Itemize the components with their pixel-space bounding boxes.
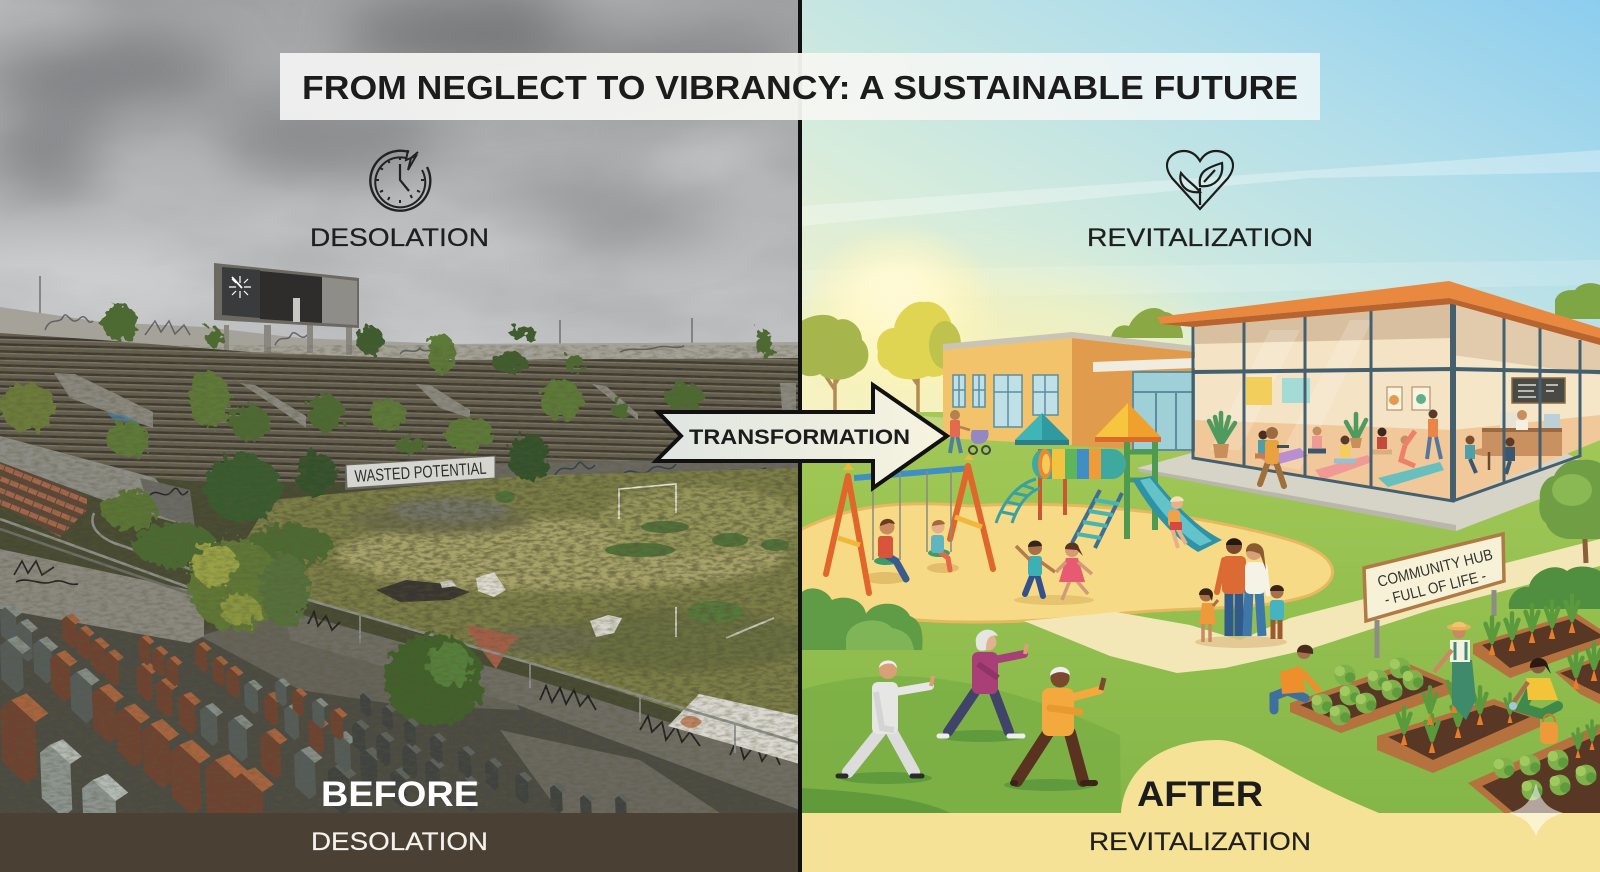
glass community hall [1137, 281, 1600, 531]
title banner: FROM NEGLECT TO VIBRANCY: A SUSTAINABLE FUTURE [302, 70, 1298, 107]
footer band: before: DESOLATION [311, 828, 488, 856]
yoga class people [1255, 410, 1441, 466]
woman in purple top [939, 630, 1027, 736]
scoreboard [214, 263, 359, 355]
stair side walls [54, 373, 796, 428]
man in white tai chi suit [838, 660, 933, 776]
bush group lower left [800, 588, 922, 650]
left graffiti retaining wall [0, 549, 204, 643]
panel: before, abandoned stadium [0, 0, 810, 860]
raised garden beds [1290, 595, 1600, 813]
grass pitch [246, 468, 798, 716]
stadium railings [0, 513, 800, 753]
bleacher terraces [0, 333, 800, 482]
vegetable bed lower right [1468, 721, 1600, 813]
tree at right edge [1539, 460, 1600, 563]
cream walking path [1024, 539, 1600, 673]
man in orange sweater [1013, 667, 1104, 783]
overgrown bushes [0, 305, 772, 726]
central divider line [798, 0, 802, 872]
swing set [826, 454, 993, 593]
heading: revitalization: REVITALIZATION [1087, 224, 1313, 252]
side concrete walls with graffiti [0, 436, 195, 528]
orange roof [1157, 281, 1600, 338]
upper stand back wall with graffiti [0, 307, 800, 360]
wall art and menu board [1246, 377, 1565, 410]
stairs [1072, 490, 1122, 548]
dark base behind the lower stadium [0, 436, 682, 723]
shrub right [1509, 566, 1600, 609]
teal and orange roofs [1015, 413, 1069, 440]
cafe counter and tables [1465, 410, 1562, 474]
icon: broken clock [370, 150, 430, 211]
tai chi seniors [838, 630, 1104, 791]
child on slide [1168, 496, 1186, 548]
bright sky with sun [790, 0, 1600, 440]
title banner [280, 53, 1320, 120]
sign: community hub [1364, 534, 1504, 658]
walking woman with tablet [1260, 427, 1289, 486]
label: after: AFTER [1137, 775, 1263, 814]
footer band: after: REVITALIZATION [1089, 828, 1311, 856]
heading: desolation: DESOLATION [310, 224, 489, 252]
floodlight poles [39, 276, 693, 344]
arrow: transformation: TRANSFORMATION [689, 426, 910, 449]
carrot bed [1377, 675, 1540, 773]
broken stadium seat rows [0, 606, 629, 813]
sign: community hub: COMMUNITY HUB [1376, 546, 1495, 591]
sand playground area [800, 504, 1333, 622]
footer band: before [0, 813, 800, 872]
photographic grain over the stadium [0, 345, 800, 813]
hall frame and mullions [1193, 302, 1600, 501]
background trees [800, 283, 1600, 412]
tube tunnel [1032, 449, 1126, 479]
sign: wasted potential: WASTED POTENTIAL [354, 459, 487, 486]
soccer goal frame [619, 484, 676, 519]
graffiti retaining wall along pitch [285, 610, 800, 810]
rubble on the pitch [376, 572, 774, 669]
arrow: transformation [656, 385, 947, 488]
upper left seating block [0, 459, 87, 537]
yoga mats [1260, 448, 1444, 487]
footer band: after [800, 813, 1600, 872]
icon: heart with sprout [1167, 151, 1233, 209]
family group [1195, 538, 1287, 648]
swing children [873, 469, 951, 579]
foreground concrete terrace [0, 590, 800, 813]
lower stand wall with graffiti [345, 458, 800, 490]
label: before: BEFORE [321, 775, 479, 814]
stormy sky [0, 0, 800, 380]
sign: community hub: - FULL OF LIFE - [1383, 568, 1488, 609]
arch ladder [996, 479, 1040, 523]
white broken shelter roof [668, 694, 800, 764]
parent with stroller [950, 410, 990, 454]
lawn background [800, 412, 1600, 813]
bed upper right [1473, 595, 1600, 678]
blue slide [1132, 476, 1222, 552]
gardeners [1274, 622, 1558, 744]
panel: after, revitalized community park [790, 0, 1600, 814]
indoor plants [1209, 413, 1366, 458]
bed far right [1555, 643, 1600, 704]
sparkle watermark [1509, 783, 1563, 836]
orange community building [943, 332, 1195, 452]
lettuce bed [1290, 658, 1453, 733]
yellow bump behind after label [1121, 740, 1379, 813]
running children [1014, 540, 1094, 605]
play structure with tube and slide [996, 403, 1222, 552]
